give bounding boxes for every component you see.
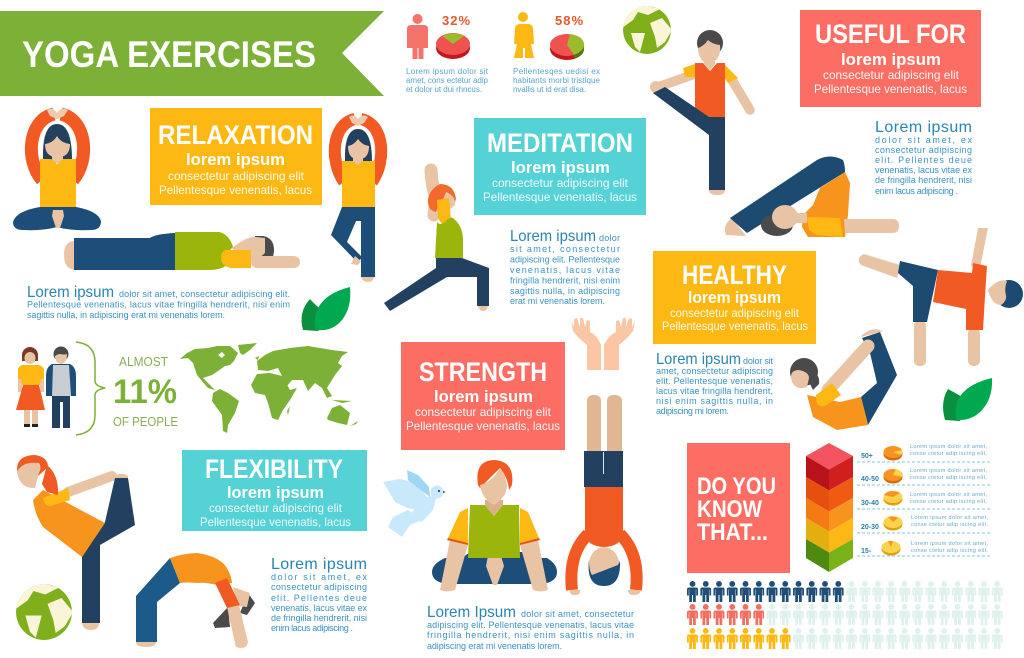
panel: meditation: Pellentesque venenatis, lacus bbox=[483, 190, 637, 204]
text block: relaxation: sagittis nulla, in adipiscing erat mi venenatis lorem. bbox=[27, 310, 225, 320]
text block: healthy: elit. Pellentesque venenatis, bbox=[656, 376, 773, 386]
text block: meditation: Lorem ipsum bbox=[510, 228, 596, 245]
title: YOGA EXERCISES bbox=[22, 34, 316, 75]
panel: flexibility: consectetur adipiscing elit bbox=[209, 501, 343, 515]
panel: flexibility: FLEXIBILITY bbox=[205, 454, 343, 484]
panel: relaxation: consectetur adipiscing elit bbox=[168, 169, 305, 183]
panel: relaxation: RELAXATION bbox=[158, 120, 313, 150]
panel: flexibility: Pellentesque venenatis, lacus bbox=[200, 515, 351, 529]
text block: strength: Lorem Ipsum bbox=[427, 604, 516, 621]
legend: age rows: 15- bbox=[861, 548, 872, 555]
legend: age rows bbox=[857, 444, 992, 556]
panel: healthy: consectetur adipiscing elit bbox=[670, 306, 800, 320]
text block: strength: dolor sit amet, consectetur bbox=[521, 609, 634, 619]
text block: meditation: adipiscing elit. Pellentesque bbox=[510, 254, 620, 264]
stat: men 32 percent: et dolor ut dui rhncus. bbox=[406, 85, 482, 94]
legend: age rows: 30-40 bbox=[861, 500, 879, 507]
girl bbox=[16, 347, 45, 427]
text block: flexibility: enim lacus adipiscing . bbox=[271, 623, 353, 633]
legend: age rows: Lorem ipsum dolor sit amet, bbox=[911, 515, 988, 521]
stat: women 58 percent: 58% bbox=[555, 13, 583, 28]
legend: age rows: conse ctetur adip iscing elit. bbox=[910, 451, 987, 457]
figure: standing yoga man bbox=[650, 30, 750, 195]
panel: strength bbox=[401, 342, 565, 450]
text block: healthy: nisi enim sagittis nulla, in bbox=[656, 396, 773, 406]
legend: age rows: conse ctetur adip iscing elit. bbox=[911, 522, 988, 528]
brace bbox=[76, 342, 105, 435]
panel: useful for: lorem ipsum bbox=[841, 50, 941, 69]
legend: age rows: 40-50 bbox=[861, 476, 879, 483]
panel: meditation: lorem ipsum bbox=[511, 158, 610, 177]
world map bbox=[180, 343, 358, 433]
text block: healthy bbox=[656, 351, 773, 416]
chart: isometric age stack bbox=[806, 443, 853, 572]
legend: age rows: conse ctetur adip iscing elit. bbox=[910, 475, 987, 481]
panel: do you know that: KNOW bbox=[697, 496, 762, 523]
figure: handstand bbox=[570, 395, 641, 595]
row: red people bbox=[687, 604, 1003, 625]
panel: healthy bbox=[653, 251, 816, 344]
text block: meditation: fringilla hendrerit, nisi enim bbox=[510, 276, 620, 286]
figure: bow pose woman bbox=[790, 329, 897, 430]
figure: couple bbox=[16, 346, 76, 428]
text block: strength: adipiscing elit. Pellentesque venenatis, lacus vitae bbox=[427, 620, 634, 630]
icon: leaf bbox=[302, 287, 350, 331]
icon: dove bbox=[383, 470, 446, 537]
text block: useful for: elit. Pellentes deue bbox=[875, 155, 972, 165]
panel: healthy: lorem ipsum bbox=[688, 288, 781, 307]
icon: globe top bbox=[622, 5, 672, 54]
panel: strength: Pellentesque venenatis, lacus bbox=[406, 419, 560, 433]
figure: warrior woman bbox=[384, 170, 489, 311]
panel: meditation: MEDITATION bbox=[487, 128, 633, 158]
text block: flexibility: Lorem ipsum bbox=[271, 556, 367, 573]
panel: useful for: consectetur adipiscing elit bbox=[823, 68, 960, 82]
legend: age rows: 20-30 bbox=[861, 524, 879, 531]
stat: men 32 percent: Lorem ipsum dolor sit bbox=[406, 67, 489, 76]
text block: relaxation: Pellentesque venenatis, lacus vitae fringilla hendrerit, nisi enim bbox=[27, 300, 290, 310]
text block: useful for: consectetur adipiscing bbox=[875, 145, 972, 155]
text block: healthy: lacus vitae fringilla hendrerit, bbox=[656, 386, 773, 396]
title banner bbox=[0, 11, 384, 96]
panel: useful for: Pellentesque venenatis, lacus bbox=[814, 82, 967, 96]
figure: tree pose woman bbox=[331, 115, 381, 282]
text block: strength bbox=[427, 604, 634, 651]
text block: useful for: enim lacus adipiscing . bbox=[875, 186, 958, 196]
figure: lying man bbox=[64, 232, 300, 270]
icon: globe bottom bbox=[15, 583, 73, 640]
text block: meditation bbox=[510, 228, 620, 306]
panel: flexibility bbox=[182, 450, 367, 531]
text block: meditation: erat mi venenatis lorem. bbox=[510, 296, 605, 306]
boy bbox=[46, 346, 76, 428]
stat: men 32 percent bbox=[406, 13, 489, 94]
panel: do you know that bbox=[687, 443, 790, 573]
text block: flexibility bbox=[271, 556, 368, 633]
legend: age rows: conse ctetur adip iscing elit. bbox=[910, 499, 987, 505]
figure: seated man bbox=[432, 460, 557, 592]
figure: backbend bbox=[136, 553, 255, 648]
statistic: almost 11 percent bbox=[113, 354, 178, 429]
legend: age rows: Lorem ipsum dolor sit amet, bbox=[910, 444, 987, 450]
statistic: almost 11 percent: 11% bbox=[113, 373, 177, 411]
figure: meditating woman bbox=[13, 109, 101, 230]
text block: healthy: dolor sit bbox=[743, 356, 773, 366]
panel: meditation: consectetur adipiscing elit bbox=[492, 176, 629, 190]
panel: strength: STRENGTH bbox=[419, 357, 547, 387]
figure: side bend man bbox=[859, 228, 1023, 366]
stat: women 58 percent: Pellentesqes uedisi ex bbox=[513, 67, 600, 76]
text block: healthy: Lorem ipsum bbox=[656, 351, 741, 368]
figure: dancer bbox=[17, 455, 135, 630]
text block: flexibility: dolor sit amet, ex bbox=[271, 572, 368, 582]
text block: useful for: de fringilla hendrerit, nisi bbox=[875, 175, 972, 185]
legend: age rows: conse ctetur adip iscing elit. bbox=[911, 548, 988, 554]
panel: flexibility: lorem ipsum bbox=[227, 483, 324, 502]
text block: useful for: venenatis, lacus vitae ex bbox=[875, 165, 972, 175]
stat: women 58 percent: nvallis ut id erat disa. bbox=[513, 85, 586, 94]
icon: hands bbox=[571, 318, 635, 370]
panel: healthy: HEALTHY bbox=[682, 260, 787, 290]
text block: flexibility: elit. Pellentes deue bbox=[271, 593, 367, 603]
panel: meditation bbox=[474, 118, 646, 215]
text block: meditation: dolor bbox=[599, 233, 620, 243]
panel: strength: lorem ipsum bbox=[434, 387, 533, 406]
text block: relaxation bbox=[27, 284, 290, 320]
text block: relaxation: Lorem ipsum bbox=[27, 284, 114, 301]
pictogram: people rows bbox=[687, 581, 1003, 649]
panel: relaxation bbox=[150, 108, 322, 205]
panel: do you know that: THAT... bbox=[697, 519, 768, 546]
stat: women 58 percent bbox=[513, 12, 601, 94]
stat: men 32 percent: 32% bbox=[442, 13, 470, 28]
text block: strength: adipiscing erat mi venenatis lorem. bbox=[427, 641, 562, 651]
panel: relaxation: lorem ipsum bbox=[186, 150, 285, 169]
text block: relaxation: dolor sit amet, consectetur adipiscing elit. bbox=[119, 289, 290, 299]
text block: meditation: sagittis nulla, in adipiscing bbox=[510, 286, 620, 296]
row: blue people bbox=[687, 581, 1003, 602]
text block: flexibility: venenatis, lacus vitae ex bbox=[271, 603, 368, 613]
figure: plow pose bbox=[725, 156, 899, 237]
legend: age rows: Lorem ipsum dolor sit amet, bbox=[910, 468, 987, 474]
text block: flexibility: consectetur adipiscing bbox=[271, 582, 367, 592]
panel: strength: consectetur adipiscing elit bbox=[415, 405, 552, 419]
text block: useful for: Lorem ipsum bbox=[875, 119, 972, 136]
text block: healthy: amet, consectetur adipiscing bbox=[656, 366, 773, 376]
statistic: almost 11 percent: ALMOST bbox=[119, 354, 168, 369]
row: yellow people bbox=[687, 628, 1003, 649]
statistic: almost 11 percent: OF PEOPLE bbox=[113, 414, 178, 429]
stat: women 58 percent: habitants morbi tristique bbox=[513, 76, 601, 85]
text block: strength: fringilla hendrerit, nisi enim sagittis nulla, in bbox=[427, 630, 634, 640]
panel: useful for: USEFUL FOR bbox=[815, 19, 966, 49]
text block: meditation: sit amet, consectetur bbox=[510, 244, 620, 254]
panel: do you know that: DO YOU bbox=[697, 473, 776, 500]
legend: age rows: Lorem ipsum dolor sit amet, bbox=[910, 492, 987, 498]
panel: relaxation: Pellentesque venenatis, lacus bbox=[159, 183, 312, 197]
text block: flexibility: de fringilla hendrerit, nisi bbox=[271, 613, 367, 623]
legend: age rows: Lorem ipsum dolor sit amet, bbox=[911, 541, 988, 547]
panel: useful for bbox=[800, 10, 981, 107]
legend: age rows: 50+ bbox=[861, 453, 873, 460]
text block: useful for: dolor sit amet, ex bbox=[875, 135, 972, 145]
stat: men 32 percent: amet, cons ectetur adip bbox=[406, 76, 489, 85]
icon: leaf right bbox=[943, 378, 992, 421]
text block: healthy: adipiscing mi lorem. bbox=[656, 406, 729, 416]
text block: meditation: venenatis, lacus vitae bbox=[510, 265, 620, 275]
panel: healthy: Pellentesque venenatis, lacus bbox=[662, 319, 808, 333]
text block: useful for bbox=[875, 119, 972, 196]
